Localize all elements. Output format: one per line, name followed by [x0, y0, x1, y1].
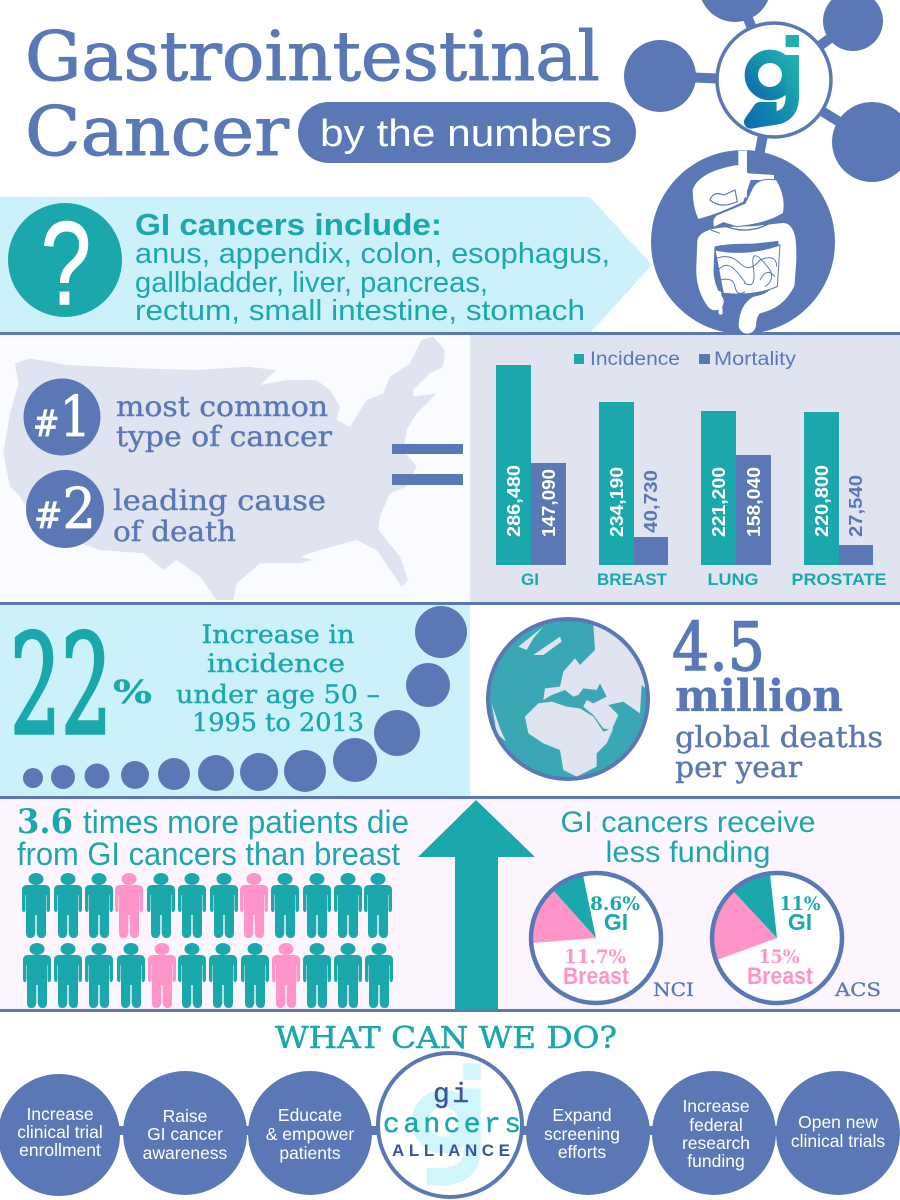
icon: globe [488, 619, 648, 779]
panel: actions [0, 1053, 900, 1197]
stat: 4.5 million: per year [675, 750, 802, 784]
category labels: PROSTATE [792, 570, 886, 589]
esophagus [738, 151, 747, 197]
action: educate patients: patients [279, 1143, 341, 1163]
text: cancer list [135, 207, 610, 327]
subtitle pill [298, 102, 636, 163]
logo: gi cancers alliance: cancers [383, 1110, 521, 1141]
panel: US statistics background [0, 335, 470, 603]
badge: #2: #2 [34, 477, 96, 542]
icon: question mark [8, 198, 122, 330]
text: increase in incidence: incidence [207, 649, 345, 678]
liver [693, 165, 774, 219]
action: new clinical trials: Open new [798, 1112, 878, 1132]
stat: 22%: 22 [10, 605, 112, 766]
icon: digestive system [651, 150, 835, 334]
transverse colon outline [721, 212, 787, 230]
heading: 3.6 times: times more patients die [83, 804, 409, 840]
heading: 3.6 times [17, 802, 409, 872]
value labels: 220,800 [812, 465, 832, 537]
text: leading cause of death: of death [113, 515, 236, 548]
text: increase in incidence: 1995 to 2013 [192, 708, 364, 737]
subtitle pill: by the numbers [320, 113, 612, 155]
panel: US ranking [3, 337, 463, 600]
action: expand screening: Expand [552, 1105, 612, 1125]
growing dots [23, 606, 467, 792]
text: leading cause of death [113, 484, 326, 548]
action: federal funding [652, 1071, 776, 1195]
stat: 4.5 million: million [675, 671, 843, 722]
action: raise awareness: GI cancer [147, 1124, 223, 1144]
panel: 22 percent increase [10, 605, 467, 792]
text: cancer list: gallbladder, liver, pancreas, [135, 267, 488, 299]
pie chart: ACS [712, 873, 881, 1003]
panel: global deaths [488, 609, 883, 784]
value labels: 286,480 [504, 465, 524, 537]
panel: bar chart background [470, 335, 900, 603]
bars [496, 365, 873, 565]
value labels: 27,540 [846, 475, 866, 537]
action: clinical trial enrollment: Increase [26, 1104, 94, 1124]
action: educate patients [248, 1071, 372, 1195]
category labels: LUNG [708, 570, 758, 589]
badge: #1: #1 [33, 385, 91, 450]
action: educate patients: Educate [278, 1105, 342, 1125]
bar chart: incidence and mortality [496, 349, 886, 589]
pie chart: NCI [531, 873, 694, 1003]
legend: Incidence [590, 349, 680, 370]
stomach [713, 179, 784, 227]
action: federal funding: research [682, 1133, 750, 1153]
action: expand screening [526, 1071, 650, 1195]
heading: 3.6 times: 3.6 [17, 802, 73, 842]
badge: #2 [26, 470, 104, 548]
pie chart: ACS: 15% [758, 946, 800, 968]
heading: what can we do: WHAT CAN WE DO? [275, 1021, 617, 1056]
text: most common type of cancer [116, 390, 333, 453]
panel: patients comparison [17, 802, 409, 1008]
pie chart: ACS: ACS [834, 979, 881, 1001]
logo: gi cancers alliance [378, 1053, 522, 1197]
pie chart: NCI: NCI [653, 979, 694, 1001]
action: educate patients: & empower [266, 1124, 354, 1144]
title: Cancer [25, 93, 290, 172]
arrow: upward teal [418, 800, 535, 1009]
title [25, 18, 600, 172]
text: cancer list: rectum, small intestine, stomach [135, 295, 585, 327]
legend [574, 349, 797, 370]
heading: less funding: GI cancers receive [560, 806, 816, 839]
pictogram: people [22, 873, 393, 1008]
logo: gi cancers alliance: gi [433, 1080, 469, 1111]
arrow band [0, 197, 652, 333]
action: raise awareness [123, 1071, 247, 1195]
value labels [504, 465, 866, 537]
action: new clinical trials: clinical trials [791, 1131, 885, 1151]
action: clinical trial enrollment [0, 1074, 120, 1196]
text: cancer list: anus, appendix, colon, esophagus, [135, 238, 610, 270]
text: most common type of cancer: most common [116, 390, 328, 423]
heading: less funding [560, 806, 816, 869]
action: clinical trial enrollment: enrollment [19, 1140, 101, 1160]
pie chart: NCI: GI [604, 909, 628, 935]
text: increase in incidence [176, 620, 380, 737]
small intestine [715, 245, 780, 294]
heading: 3.6 times: from GI cancers than breast [17, 836, 400, 872]
network of circles [624, 0, 900, 242]
stat: 4.5 million: 4.5 [672, 609, 765, 686]
text: cancer list: GI cancers include: [135, 207, 442, 242]
panel: funding [531, 806, 881, 1003]
badge: #1 [24, 378, 100, 456]
logo: gi cancers alliance: ALLIANCE [392, 1141, 510, 1160]
icon: gi logo [717, 23, 831, 137]
pie chart: ACS: Breast [747, 963, 813, 990]
action: new clinical trials [776, 1071, 900, 1195]
stat: 4.5 million: global deaths [675, 720, 883, 754]
value labels: 234,190 [607, 467, 627, 537]
icon: question mark: ? [41, 198, 91, 330]
icon: equals sign [392, 444, 463, 485]
panel: incidence background [0, 605, 470, 797]
action: federal funding: Increase [682, 1096, 750, 1116]
action: federal funding: funding [687, 1151, 745, 1171]
panel: patients and funding background [0, 799, 900, 1010]
category labels: GI [521, 570, 539, 589]
category labels: BREAST [597, 570, 668, 589]
value labels: 221,200 [709, 467, 729, 537]
pie chart: NCI: 8.6% [590, 893, 640, 915]
panel: GI cancers include [0, 197, 652, 333]
stat: 22%: % [113, 673, 152, 711]
heading: less funding: less funding [606, 836, 770, 869]
gallbladder [710, 190, 737, 205]
pie chart: ACS: 11% [780, 893, 820, 915]
action: expand screening: screening [544, 1124, 620, 1144]
value labels: 147,090 [539, 469, 559, 537]
text: leading cause of death: leading cause [113, 484, 326, 517]
legend: Mortality [714, 349, 797, 370]
map of United States [3, 337, 445, 600]
text: most common type of cancer: type of cancer [116, 420, 333, 453]
text: increase in incidence: Increase in [202, 620, 354, 649]
action: raise awareness: awareness [143, 1143, 228, 1163]
pie chart: NCI: Breast [563, 963, 629, 990]
pie chart: NCI: 11.7% [564, 946, 626, 968]
text: increase in incidence: under age 50 – [176, 680, 380, 709]
colon [705, 232, 788, 325]
action: raise awareness: Raise [163, 1106, 207, 1126]
stat: 4.5 million [672, 609, 883, 784]
value labels: 40,730 [641, 470, 661, 533]
pie chart: ACS: GI [788, 909, 812, 935]
action: clinical trial enrollment: clinical trial [17, 1122, 103, 1142]
category labels [521, 570, 886, 589]
action: expand screening: efforts [558, 1142, 606, 1162]
title: Gastrointestinal [25, 18, 600, 97]
value labels: 158,040 [744, 467, 764, 537]
action: federal funding: federal [689, 1115, 743, 1135]
